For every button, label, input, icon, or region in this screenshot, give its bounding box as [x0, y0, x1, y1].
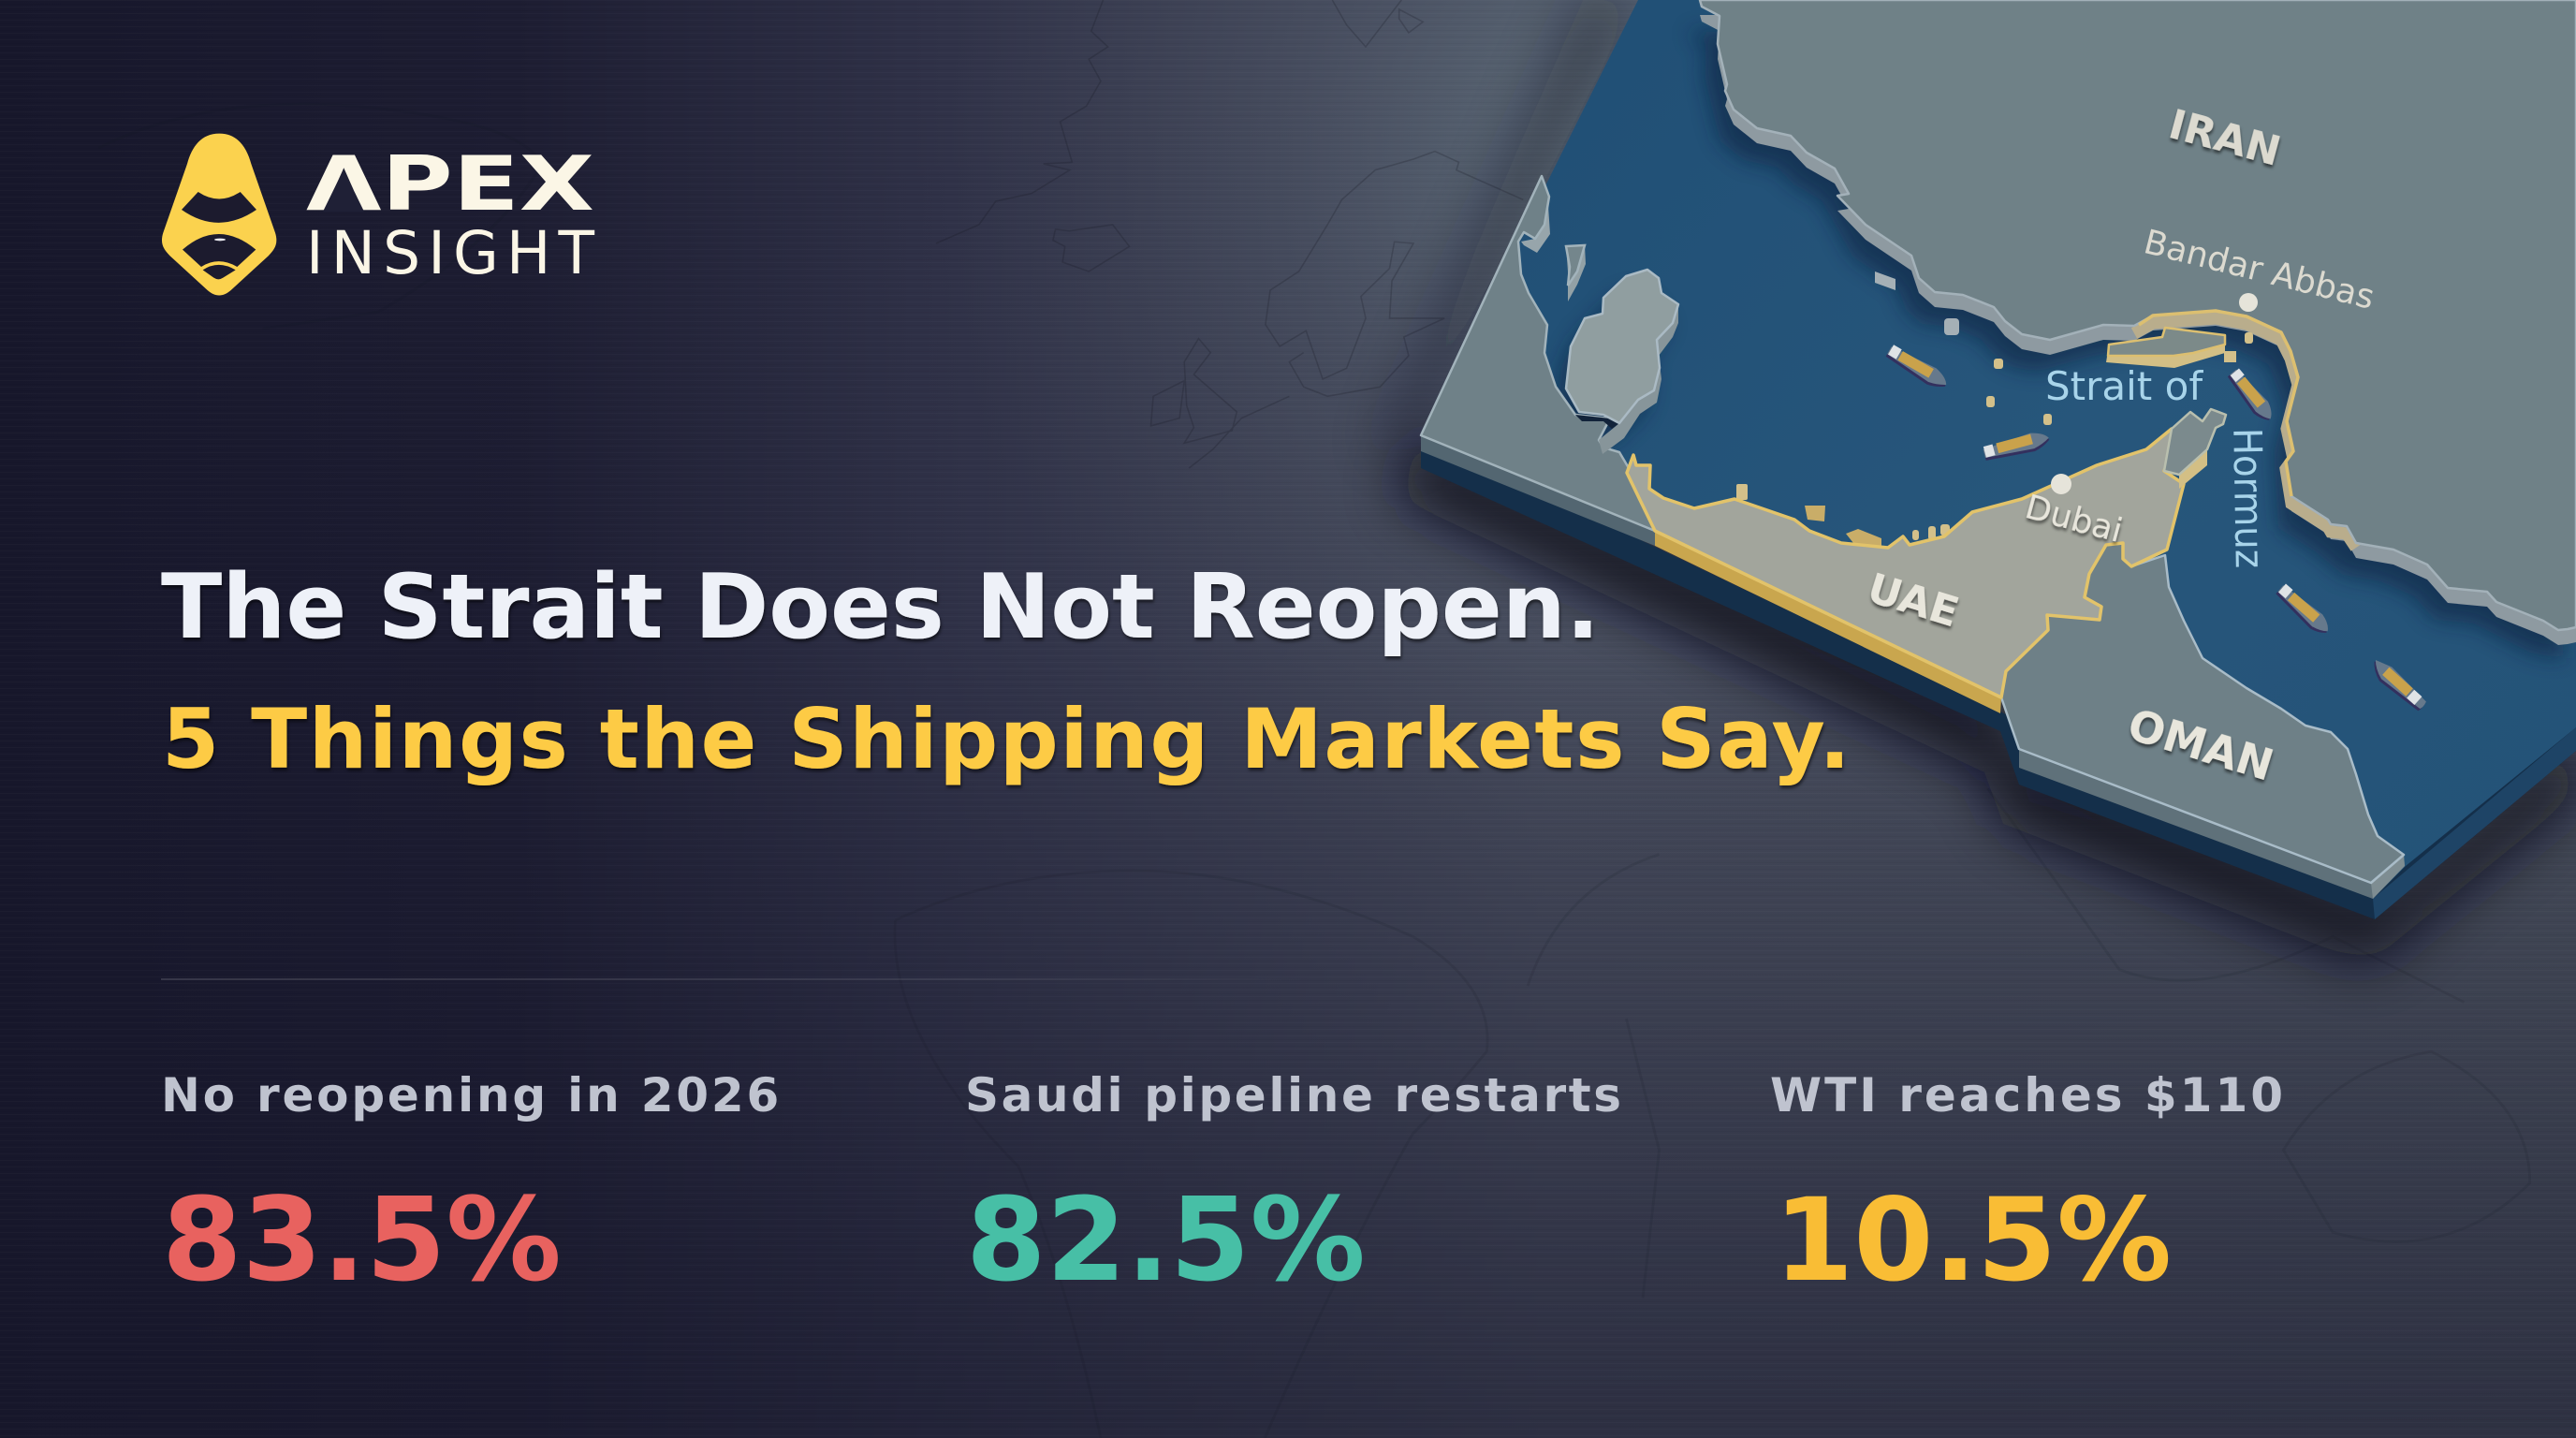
marker: bandar abbas [2239, 293, 2258, 312]
ship 1 [1884, 344, 1951, 393]
uae wall [1655, 531, 2001, 713]
ship 5 [2367, 655, 2429, 714]
stat: no reopening [161, 1068, 782, 1308]
ship 4 [2274, 582, 2334, 638]
label: hormuz: Hormuz [2224, 428, 2273, 568]
oman wall [2019, 749, 2405, 899]
ship 3 [2225, 367, 2277, 425]
map panel [1376, 0, 2576, 964]
sea edge wall [2373, 727, 2576, 919]
stat: saudi pipeline [965, 1068, 1624, 1308]
logo wordmark: APEX: APEX [306, 140, 594, 227]
oman land [2001, 543, 2404, 883]
logo wordmark: INSIGHT: INSIGHT [306, 219, 595, 287]
stat label: WTI reaches $110 [1770, 1068, 2286, 1123]
stat label: No reopening in 2026 [161, 1068, 782, 1123]
label: oman: OMAN [2122, 699, 2279, 791]
label: uae: UAE [1862, 565, 1964, 637]
divider [161, 978, 1312, 980]
musandam [2164, 409, 2226, 489]
map shadow [1395, 435, 2576, 964]
iran wall [1700, 15, 2576, 645]
title: The Strait Does Not Reopen. [161, 554, 1600, 659]
arabia land [1421, 176, 1655, 546]
subtitle: 5 Things the Shipping Markets Say. [162, 691, 1852, 787]
label: bandar abbas: Bandar Abbas [2140, 223, 2378, 317]
uae land [1627, 429, 2184, 697]
small islands [1736, 271, 2253, 550]
icon: logo mark [162, 134, 276, 295]
ship 2 [1983, 429, 2051, 464]
stat value: 10.5% [1774, 1173, 2172, 1307]
stat value: 82.5% [966, 1174, 1366, 1308]
label: iran: IRAN [2164, 100, 2286, 176]
oman corner wall [2371, 855, 2405, 899]
upper left map shadow [1376, 0, 1638, 459]
stat label: Saudi pipeline restarts [965, 1068, 1624, 1123]
island [1566, 245, 1586, 301]
iran gold coast [2139, 311, 2298, 496]
qatar [1566, 270, 1678, 454]
map side wall [1421, 435, 2576, 919]
coast shadows [1557, 32, 2563, 659]
stat value: 83.5% [162, 1174, 562, 1308]
iran gold wall [2134, 318, 2356, 548]
sea [1421, 0, 2576, 899]
iran land [1700, 0, 2576, 630]
stat: wti [1770, 1068, 2286, 1307]
label: dubai: Dubai [2021, 488, 2127, 550]
logo [162, 134, 595, 295]
label: strait of: Strait of [2045, 363, 2203, 409]
qeshm island [2106, 328, 2225, 368]
marker: dubai [2051, 474, 2071, 494]
